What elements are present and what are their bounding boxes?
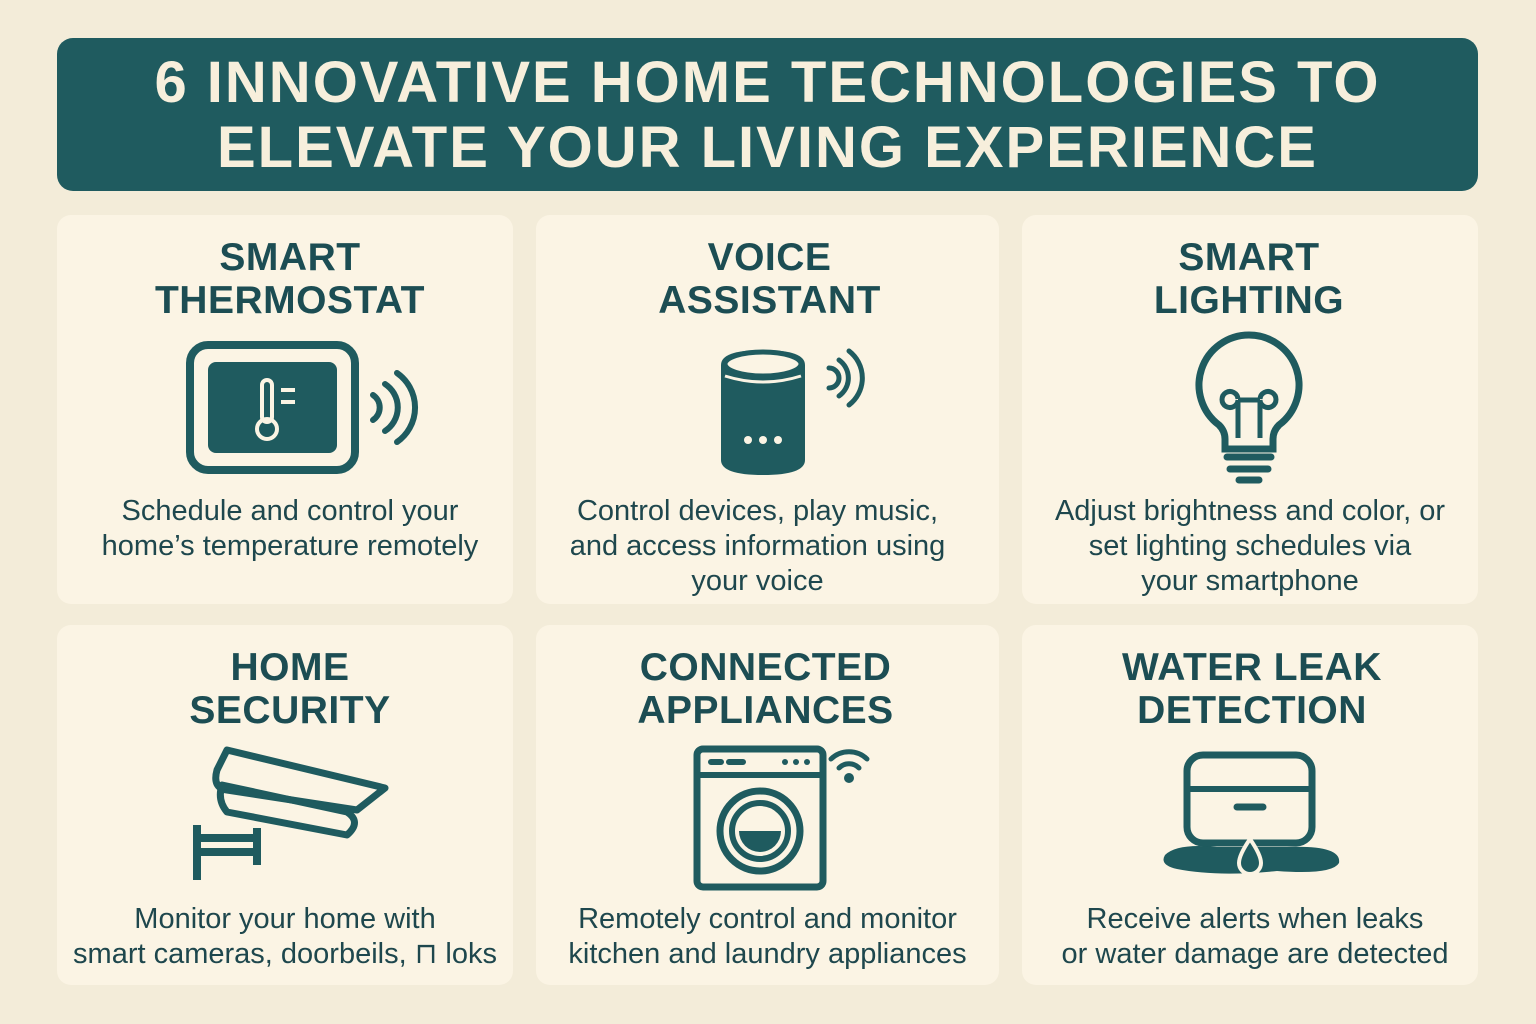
title: ELEVATE YOUR LIVING EXPERIENCE [217, 115, 1318, 180]
text: set lighting schedules via [1089, 530, 1411, 562]
text [102, 495, 478, 562]
text: or water damage are detected [1062, 938, 1448, 970]
panel: smart thermostat [57, 215, 513, 604]
panel: smart thermostat: THERMOSTAT [155, 279, 425, 322]
text: Monitor your home with [134, 903, 436, 935]
panel: smart lighting [1022, 215, 1478, 604]
icon: light bulb [1195, 332, 1303, 484]
panel: voice assistant [536, 215, 999, 604]
text [1062, 903, 1448, 970]
panel: water leak detection: WATER LEAK [1122, 646, 1382, 689]
icon: washing machine [694, 746, 870, 890]
text: Remotely control and monitor [578, 903, 957, 935]
text: home’s temperature remotely [102, 530, 478, 562]
title [57, 38, 1478, 191]
panel: smart lighting: SMART [1178, 236, 1320, 279]
text: your smartphone [1141, 565, 1359, 597]
text: your voice [691, 565, 824, 597]
icon: leak sensor [1164, 752, 1340, 874]
text: smart cameras, doorbeils, ⊓ loks [73, 938, 497, 970]
panel: connected appliances: CONNECTED [640, 646, 891, 689]
text: Adjust brightness and color, or [1055, 495, 1445, 527]
text: Schedule and control your [122, 495, 458, 527]
text [73, 903, 497, 970]
text [570, 495, 945, 597]
text: and access information using [570, 530, 945, 562]
icon: thermostat [186, 341, 418, 474]
panel: home security [57, 625, 513, 985]
text: Receive alerts when leaks [1087, 903, 1423, 935]
icon: smart speaker [721, 348, 865, 475]
text [1055, 495, 1445, 597]
title: 6 INNOVATIVE HOME TECHNOLOGIES TO [154, 50, 1381, 115]
panel: voice assistant: ASSISTANT [658, 279, 881, 322]
text [568, 903, 967, 970]
panel: smart thermostat: SMART [219, 236, 361, 279]
text: Control devices, play music, [577, 495, 938, 527]
panel: water leak detection [1022, 625, 1478, 985]
panel: connected appliances [536, 625, 999, 985]
panel: water leak detection: DETECTION [1137, 689, 1367, 732]
icon: security camera [193, 746, 388, 880]
panel: voice assistant: VOICE [708, 236, 831, 279]
panel: connected appliances: APPLIANCES [637, 689, 894, 732]
panel: home security: SECURITY [189, 689, 391, 732]
panel: smart lighting: LIGHTING [1154, 279, 1344, 322]
panel: home security: HOME [230, 646, 350, 689]
text: kitchen and laundry appliances [568, 938, 967, 970]
